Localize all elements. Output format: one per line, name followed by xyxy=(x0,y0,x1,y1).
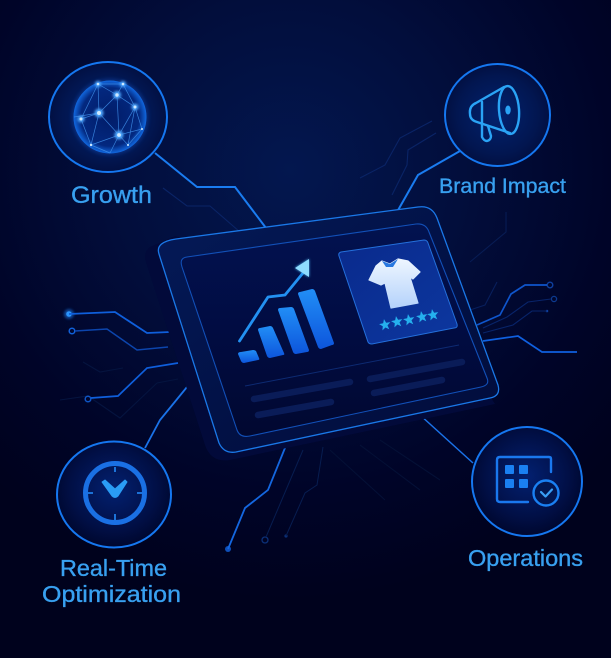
trace 1 with glowing node xyxy=(64,309,170,333)
trace C with dot node xyxy=(483,310,548,333)
bar 3 xyxy=(278,307,309,354)
bar chart xyxy=(238,289,334,363)
bar 4 xyxy=(298,289,334,349)
label: Growth xyxy=(71,182,152,209)
circle xyxy=(445,64,550,166)
label: Brand Impact xyxy=(439,175,566,198)
panel: Operations xyxy=(468,427,583,571)
trace B with ring node xyxy=(483,296,557,328)
label: Optimization xyxy=(42,581,181,607)
icon: megaphone xyxy=(470,85,521,141)
trend arrow xyxy=(240,259,309,341)
tablet body xyxy=(158,207,499,452)
label: Operations xyxy=(468,545,583,571)
bar 2 xyxy=(258,326,284,358)
bottom trace with small dot xyxy=(284,447,323,538)
product card xyxy=(339,240,457,344)
tablet screen xyxy=(181,224,488,436)
circle xyxy=(57,442,171,548)
circle xyxy=(49,62,167,172)
icon: network globe xyxy=(72,79,148,155)
bottom trace with ring node xyxy=(262,450,303,543)
trace D xyxy=(483,336,577,352)
connector: Operations to tablet xyxy=(420,415,473,463)
connector: Real-Time Optimization to tablet xyxy=(145,387,187,448)
connector: Brand Impact to tablet xyxy=(397,151,460,212)
faint background circuit traces xyxy=(60,121,506,500)
shirt collar xyxy=(382,259,398,267)
panel: Growth xyxy=(49,62,167,209)
panel: Real-Time Optimization xyxy=(42,442,181,607)
label: Real-Time xyxy=(60,555,167,581)
icon: calendar grid with check xyxy=(497,457,558,506)
left circuit traces xyxy=(64,309,178,402)
panel: central tablet xyxy=(145,207,499,460)
right circuit traces xyxy=(477,282,577,352)
bottom trace with dot node xyxy=(225,443,287,552)
connector: Growth to tablet xyxy=(155,153,266,228)
circle xyxy=(472,427,582,536)
placeholder text lines xyxy=(254,362,462,415)
trace 3 with ring node xyxy=(85,363,178,402)
trace 2 with ring node xyxy=(69,328,168,350)
tablet shadow side xyxy=(145,236,495,460)
trace A with ring node xyxy=(477,282,553,325)
panel: Brand Impact xyxy=(439,64,566,198)
icon: t-shirt xyxy=(369,259,420,308)
divider xyxy=(245,345,459,386)
five star rating xyxy=(378,308,439,331)
bottom circuit traces xyxy=(225,443,323,552)
bar 1 xyxy=(238,350,259,363)
label xyxy=(42,555,181,607)
icon: clock xyxy=(86,464,144,522)
